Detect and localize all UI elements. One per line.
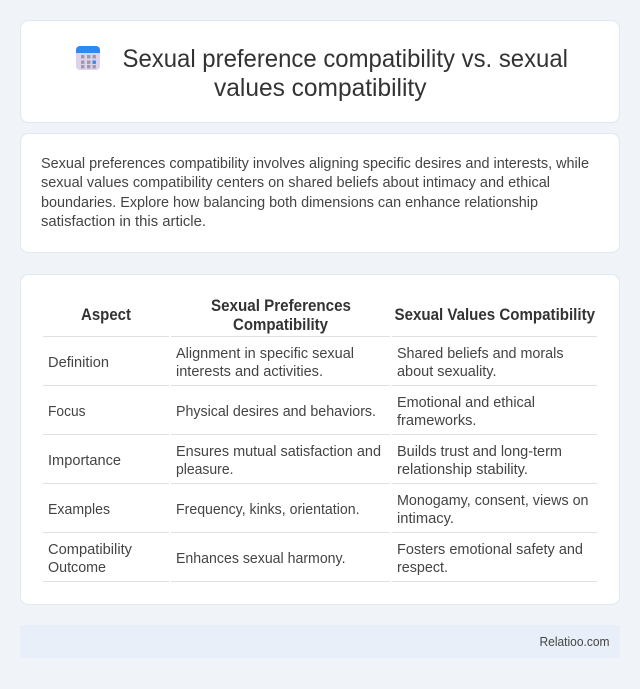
footer: Relatioo.com <box>540 634 610 649</box>
row: examples: Monogamy, consent, views on <box>397 492 588 509</box>
title text <box>122 45 568 102</box>
row: importance <box>48 443 562 478</box>
row: importance: Ensures mutual satisfaction and <box>176 443 381 460</box>
title text: values compatibility <box>214 74 427 102</box>
row: definition: Shared beliefs and morals <box>397 345 564 362</box>
row: focus: Physical desires and behaviors. <box>176 403 376 420</box>
icon: calendar <box>76 46 100 70</box>
row: focus: frameworks. <box>397 412 476 429</box>
row: focus <box>48 394 535 429</box>
row: compatibility outcome: Fosters emotional safety and <box>397 541 583 558</box>
row: compatibility outcome: Enhances sexual harmony. <box>176 550 346 567</box>
row: importance: pleasure. <box>176 461 234 478</box>
row: definition: Alignment in specific sexual <box>176 345 354 362</box>
row: examples: intimacy. <box>397 510 454 527</box>
row: definition: Definition <box>48 354 109 371</box>
row: focus: Emotional and ethical <box>397 394 535 411</box>
row: compatibility outcome: Compatibility <box>48 541 132 558</box>
row: importance: relationship stability. <box>397 461 528 478</box>
row: importance: Builds trust and long-term <box>397 443 562 460</box>
panel: comparison table <box>20 274 620 604</box>
intro text <box>41 155 589 230</box>
table header: Compatibility <box>233 316 328 334</box>
row: examples: Frequency, kinks, orientation. <box>176 501 360 518</box>
table header: Aspect <box>81 306 132 324</box>
intro text: sexual values compatibility centers on shared beliefs about intimacy and ethical <box>41 174 550 191</box>
row: compatibility outcome: respect. <box>397 559 448 576</box>
row: compatibility outcome <box>48 541 583 576</box>
row: importance: Importance <box>48 452 121 469</box>
intro text: satisfaction in this article. <box>41 213 206 230</box>
table header: Sexual Values Compatibility <box>394 306 595 324</box>
footer <box>20 625 620 658</box>
title text: Sexual preference compatibility vs. sexual <box>122 45 568 73</box>
row: focus: Focus <box>48 403 86 420</box>
panel: introduction <box>20 134 620 252</box>
row: definition: interests and activities. <box>176 363 323 380</box>
row: definition: about sexuality. <box>397 363 496 380</box>
table header: Sexual Preferences <box>211 297 351 315</box>
row: examples: Examples <box>48 501 110 518</box>
row: compatibility outcome: Outcome <box>48 559 106 576</box>
intro text: Sexual preferences compatibility involves aligning specific desires and interests, while <box>41 155 589 172</box>
intro text: boundaries. Explore how balancing both dimensions can enhance relationship <box>41 194 538 211</box>
row: examples <box>48 492 588 527</box>
panel: title <box>20 20 620 122</box>
row: definition <box>48 345 564 380</box>
table header <box>81 297 595 334</box>
